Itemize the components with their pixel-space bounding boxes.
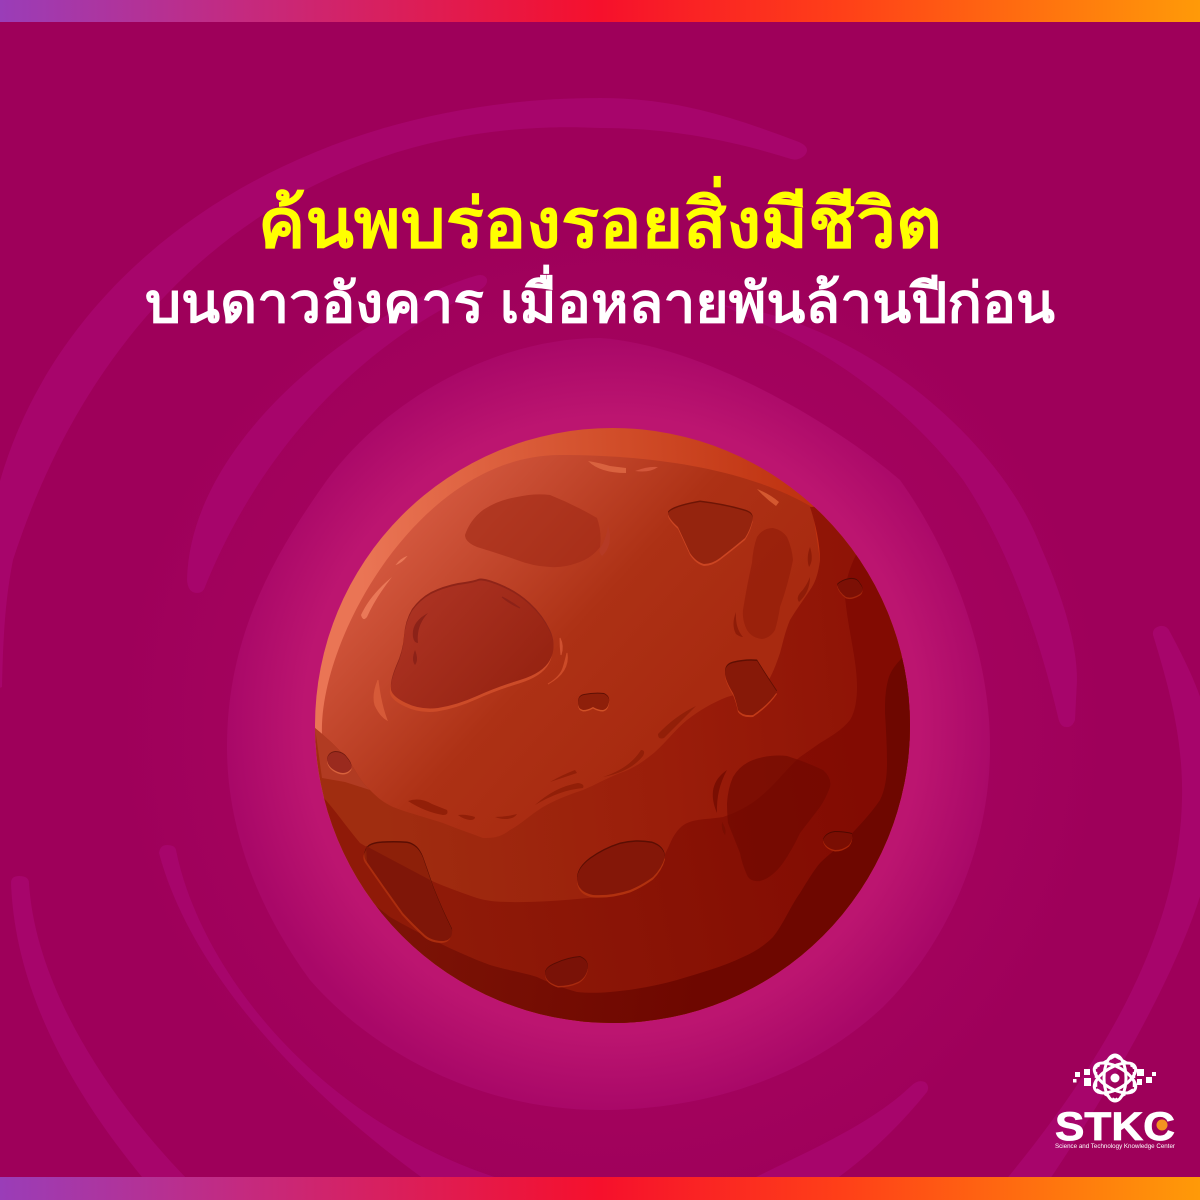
logo wordmark: STKC xyxy=(1055,1105,1175,1149)
crater: small left xyxy=(327,751,352,774)
crater: dark patch lower right xyxy=(727,756,830,881)
icon: data pixels xyxy=(1073,1069,1156,1086)
crater inner shadows xyxy=(413,613,428,643)
crater: long lower left xyxy=(363,841,452,943)
surface layer: lit patch on left edge xyxy=(315,728,370,790)
logo: STKC xyxy=(1055,1055,1175,1150)
logo caption: Science and Technology Knowledge Center xyxy=(1055,1144,1175,1150)
crater: top right xyxy=(668,500,753,566)
crater: small lower right xyxy=(823,831,852,852)
planet Mars xyxy=(300,420,930,1040)
crater: elongated patch right xyxy=(743,528,793,639)
planet glow xyxy=(227,338,990,1110)
title xyxy=(145,175,1055,334)
crater: right middle xyxy=(725,659,777,717)
top gradient bar xyxy=(0,0,1200,22)
title line 1: ค้นพบร่องรอยสิ่งมีชีวิต xyxy=(258,175,942,262)
bottom gradient bar xyxy=(0,1177,1200,1200)
crater: lower centre xyxy=(577,840,665,898)
surface highlights and ridges xyxy=(361,461,812,835)
soft halo behind glow xyxy=(112,225,1112,1200)
crater: small far right xyxy=(837,578,862,599)
crater: soft patch top xyxy=(465,494,601,567)
icon: atom xyxy=(1090,1055,1140,1101)
crater: bottom xyxy=(545,956,588,988)
title line 2: บนดาวอังคาร เมื่อหลายพันล้านปีก่อน xyxy=(145,264,1055,334)
surface layer: mid tone xyxy=(322,455,820,845)
crater: small centre xyxy=(578,693,609,712)
surface layer: shaded band xyxy=(300,500,930,1040)
crater rim highlights xyxy=(560,638,562,655)
logo orange dot xyxy=(1156,1120,1168,1130)
surface layer: dark band xyxy=(324,555,910,1023)
surface layer: darkest band xyxy=(376,658,910,1023)
crater: large upper left xyxy=(374,579,567,720)
